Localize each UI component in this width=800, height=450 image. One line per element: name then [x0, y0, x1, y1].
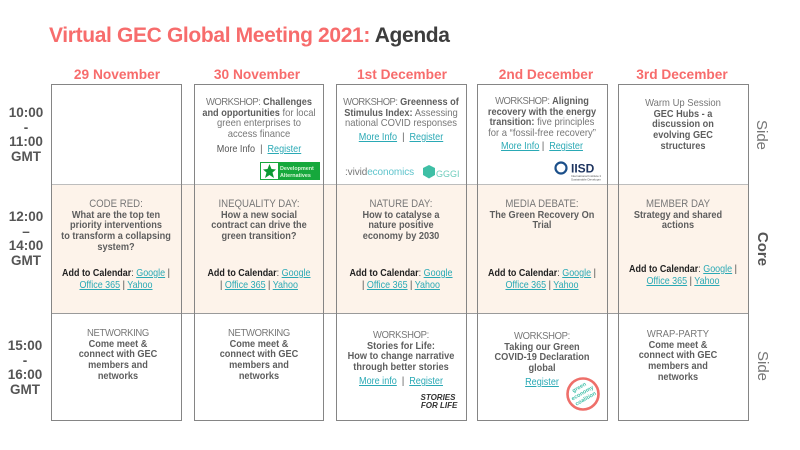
session: 3 Dec warm up: Warm Up Session	[645, 98, 721, 109]
core row band	[51, 184, 749, 314]
session: Networking 29 Nov	[79, 328, 157, 382]
session: 3 Dec warm up: discussion on	[652, 119, 714, 130]
session: Networking 29 Nov: NETWORKING	[87, 328, 149, 339]
session: Networking 29 Nov: Come meet &	[89, 339, 147, 350]
session: Member Day: Strategy and shared	[634, 210, 722, 221]
column 3 frame	[336, 84, 467, 421]
column 1 frame	[51, 84, 182, 421]
time label: 15:00-16:00 GMT: GMT	[10, 382, 40, 397]
logo: GGGI	[423, 165, 460, 179]
time label: 15:00-16:00 GMT	[8, 338, 42, 397]
time label: 12:00-14:00 GMT: GMT	[11, 253, 41, 268]
logo: Green Economy Coalition	[566, 377, 600, 411]
session: 2 Dec workshop: for a “fossil-free recovery”	[488, 128, 596, 139]
logo: Development Alternatives: Alternatives	[280, 173, 311, 179]
calendar links: Nature Day: | Office 365 | Yahoo	[362, 280, 440, 291]
link: Register: Register	[525, 377, 559, 388]
column 2 frame	[194, 84, 324, 421]
calendar links: Member Day: Add to Calendar: Google |	[629, 264, 737, 275]
calendar links: Media Debate	[488, 268, 596, 291]
session: Nature Day: NATURE DAY:	[370, 198, 432, 210]
session: 1 Dec workshop: WORKSHOP: Greenness of	[343, 97, 459, 108]
session: Stories for Life: through better stories	[353, 362, 449, 373]
logo: IISD	[554, 161, 601, 182]
time label: 10:00-11:00 GMT: 10:00	[9, 105, 43, 120]
calendar links: Nature Day	[349, 268, 453, 291]
session: Networking 30 Nov: NETWORKING	[228, 328, 290, 339]
time label: 12:00-14:00 GMT: 12:00	[9, 209, 43, 224]
logo: Development Alternatives	[260, 162, 320, 180]
links: 2 Dec: More Info | Register	[501, 141, 583, 152]
links: Stories for Life: More info | Register	[359, 376, 443, 387]
logo: Stories for Life: FOR LIFE	[421, 401, 457, 410]
session: Wrap-party: Come meet &	[649, 340, 707, 351]
session: Stories for Life	[348, 330, 454, 373]
session: Networking 30 Nov: networks	[239, 371, 279, 382]
calendar links: Media Debate: Add to Calendar: Google |	[488, 268, 596, 279]
time label: 10:00-11:00 GMT: 11:00	[9, 134, 43, 149]
time label: 15:00-16:00 GMT: -	[23, 353, 27, 368]
logo: Stories for Life: STORIES	[420, 393, 455, 402]
session: Code Red: priority interventions	[70, 220, 162, 231]
session: Networking 30 Nov	[220, 328, 298, 382]
session: 3 Dec warm up	[645, 98, 721, 152]
session: Wrap-party: WRAP-PARTY	[647, 329, 709, 340]
session: Member Day: MEMBER DAY	[646, 198, 710, 210]
session: Nature Day: economy by 2030	[363, 231, 439, 242]
calendar links: Inequality Day	[207, 268, 311, 291]
session: 3 Dec warm up: GEC Hubs - a	[654, 109, 712, 120]
logo: Development Alternatives: Development	[280, 166, 314, 172]
session: Code Red: What are the top ten	[72, 210, 160, 221]
time label: 12:00-14:00 GMT: –	[22, 224, 30, 239]
session: Code Red: system?	[97, 242, 135, 253]
session: Inequality Day	[211, 198, 307, 242]
session: Nature Day: How to catalyse a	[362, 210, 440, 221]
logo: Green Economy Coalition: coalition	[575, 391, 598, 408]
session: Taking our Green COVID-19 Declaration: Taking our Green	[504, 342, 580, 353]
title: Virtual GEC Global Meeting 2021: Agenda	[49, 24, 450, 47]
session: Media Debate: Trial	[533, 220, 551, 231]
session: Taking our Green COVID-19 Declaration: WORKSHOP:	[514, 331, 570, 342]
calendar links: Code Red: Add to Calendar: Google |	[62, 268, 170, 279]
session: Media Debate: The Green Recovery On	[490, 210, 594, 221]
time label: 15:00-16:00 GMT: 15:00	[8, 338, 42, 353]
session: Taking our Green COVID-19 Declaration	[494, 331, 589, 374]
session: Code Red: CODE RED:	[89, 198, 143, 210]
session: Stories for Life: Stories for Life:	[367, 341, 435, 352]
session: 2 Dec workshop	[488, 96, 596, 139]
session: 3 Dec warm up: structures	[661, 141, 705, 152]
side label: top: Side	[753, 120, 770, 150]
time label: 10:00-11:00 GMT	[9, 105, 43, 164]
session: Networking 29 Nov: connect with GEC	[79, 349, 157, 360]
session: 1 Dec workshop: national COVID responses	[345, 118, 457, 129]
time label: 12:00-14:00 GMT	[9, 209, 43, 268]
session: Networking 30 Nov: connect with GEC	[220, 349, 298, 360]
session: Stories for Life: WORKSHOP:	[373, 330, 429, 341]
calendar links: Inequality Day: Add to Calendar: Google	[207, 268, 311, 279]
logo: IISD: IISD	[571, 162, 595, 176]
day heading: 2nd December: 2nd December	[499, 66, 593, 82]
session: Networking 29 Nov: members and	[88, 360, 148, 371]
calendar links: Media Debate: Office 365 | Yahoo	[505, 280, 579, 291]
session: 2 Dec workshop: transition: five principles	[490, 117, 594, 128]
time label: 15:00-16:00 GMT: 16:00	[8, 367, 42, 382]
day heading: 1st December: 1st December	[357, 66, 447, 82]
logo: Vivid Economics: :vivideconomics	[345, 167, 414, 178]
session: Wrap-party: networks	[658, 372, 698, 383]
column 5 frame	[618, 84, 749, 421]
time label: 12:00-14:00 GMT: 14:00	[9, 238, 43, 253]
session: Inequality Day: contract can drive the	[211, 220, 307, 231]
calendar links: Code Red: Office 365 | Yahoo	[79, 280, 153, 291]
session: Member Day	[634, 198, 722, 231]
session: Networking 30 Nov: Come meet &	[230, 339, 288, 350]
time label: 10:00-11:00 GMT: -	[24, 120, 28, 135]
session: 30 Nov workshop: access finance	[228, 129, 290, 140]
session: Code Red: to transform a collapsing	[61, 231, 171, 242]
session: Code Red	[61, 198, 171, 253]
day heading: 29 November: 29 November	[74, 66, 160, 82]
session: Taking our Green COVID-19 Declaration: COVID-19 Declaration	[495, 352, 589, 363]
logo: GGGI: GGGI	[436, 169, 460, 179]
side label: bottom: Side	[754, 351, 771, 381]
session: Wrap-party: connect with GEC	[639, 350, 717, 361]
day heading: 30 November: 30 November	[214, 66, 300, 82]
links: 30 Nov: More Info | Register	[217, 144, 301, 155]
session: Inequality Day: How a new social	[221, 210, 297, 221]
session: Stories for Life: How to change narrative	[348, 351, 454, 362]
session: 30 Nov workshop	[202, 97, 316, 140]
session: 30 Nov workshop: green enterprises to	[217, 118, 301, 129]
time label: 10:00-11:00 GMT: GMT	[11, 149, 41, 164]
session: 30 Nov workshop: and opportunities for local	[202, 108, 316, 119]
session: 2 Dec workshop: recovery with the energy	[488, 107, 596, 118]
calendar links: Member Day	[629, 264, 737, 287]
session: Media Debate: MEDIA DEBATE:	[505, 198, 579, 210]
calendar links: Nature Day: Add to Calendar: Google	[349, 268, 453, 279]
session: Media Debate	[490, 198, 594, 231]
logo: Green Economy Coalition: green	[571, 381, 588, 394]
session: 2 Dec workshop: WORKSHOP: Aligning	[495, 96, 589, 107]
logo: Stories for Life	[420, 393, 458, 410]
day heading: 3rd December: 3rd December	[636, 66, 728, 82]
session: Inequality Day: green transition?	[221, 231, 297, 242]
session: Taking our Green COVID-19 Declaration: global	[528, 363, 556, 374]
session: 3 Dec warm up: evolving GEC	[653, 130, 713, 141]
session: Member Day: actions	[662, 220, 694, 231]
calendar links: Inequality Day: | Office 365 | Yahoo	[220, 280, 298, 291]
column 4 frame	[477, 84, 608, 421]
session: 1 Dec workshop	[343, 97, 459, 129]
calendar links: Code Red	[62, 268, 170, 291]
session: Nature Day: nature positive	[368, 220, 434, 231]
session: Networking 30 Nov: members and	[229, 360, 289, 371]
side label: core: Core	[754, 232, 771, 266]
links: 1 Dec: More Info | Register	[359, 132, 443, 143]
session: Wrap-party	[639, 329, 717, 383]
session: Nature Day	[362, 198, 440, 242]
session: Inequality Day: INEQUALITY DAY:	[218, 198, 300, 210]
session: Networking 29 Nov: networks	[98, 371, 138, 382]
session: Wrap-party: members and	[648, 361, 708, 372]
logo: Green Economy Coalition: economy	[571, 384, 596, 402]
calendar links: Member Day: Office 365 | Yahoo	[646, 276, 720, 287]
session: 30 Nov workshop: WORKSHOP: Challenges	[206, 97, 312, 108]
session: 1 Dec workshop: Stimulus Index: Assessing	[344, 108, 458, 119]
